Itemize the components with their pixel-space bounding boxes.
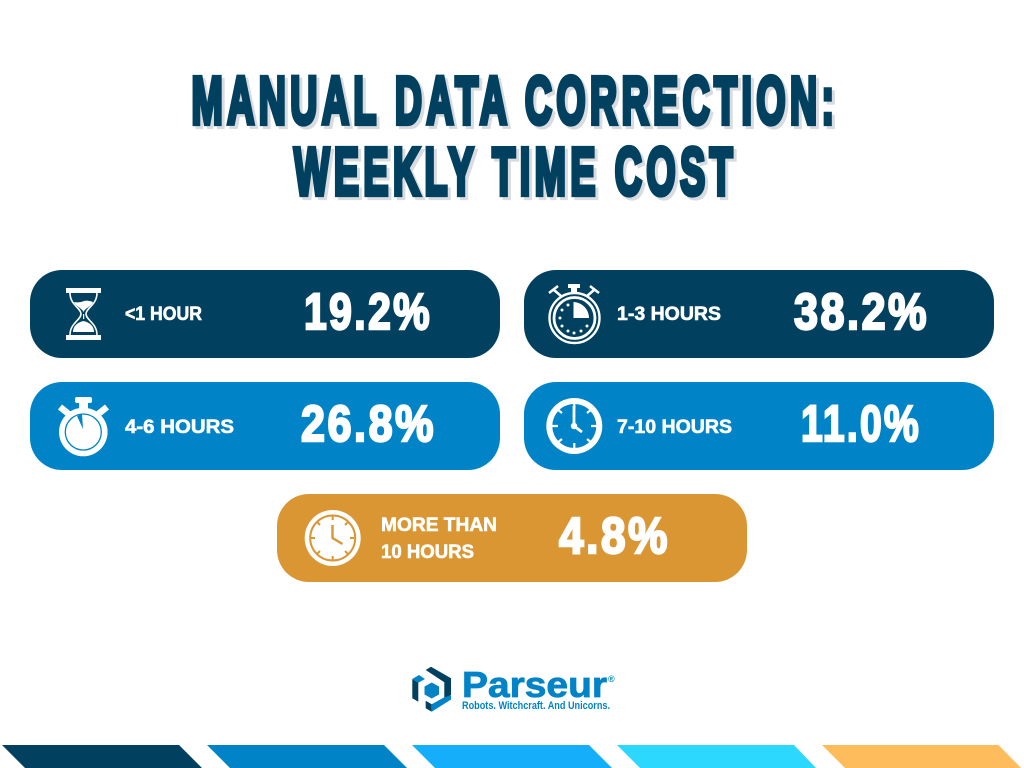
icon: Parseur hexagon mark bbox=[412, 667, 451, 712]
panel: more than 10 hours bbox=[277, 494, 747, 582]
label: 7-10 hours: 7-10 HOURS bbox=[617, 417, 732, 438]
title bbox=[192, 64, 842, 212]
icon: stopwatch with quarter dial bbox=[549, 284, 600, 343]
icon: white clock bbox=[305, 510, 361, 566]
wordmark: Parseur bbox=[462, 664, 607, 705]
footer color stripes bbox=[2, 745, 1021, 768]
panel: 1-3 hours bbox=[524, 270, 994, 358]
value: 38.2%: 38.2% bbox=[794, 283, 929, 340]
panel: 7-10 hours bbox=[524, 382, 994, 470]
icon: clock at four bbox=[546, 398, 602, 454]
panel: less than 1 hour bbox=[30, 270, 500, 358]
icon: hourglass bbox=[66, 288, 101, 340]
icon: stopwatch bbox=[59, 397, 108, 456]
value: 11.0%: 11.0% bbox=[801, 395, 921, 452]
registered mark: ® bbox=[608, 674, 615, 684]
label: 1-3 hours: 1-3 HOURS bbox=[617, 304, 721, 325]
label: less than 1 hour: <1 HOUR bbox=[125, 304, 202, 325]
tagline: Robots. Witchcraft. And Unicorns. bbox=[462, 700, 610, 712]
logo: Parseur bbox=[412, 664, 615, 712]
panel: 4-6 hours bbox=[30, 382, 500, 470]
value: 19.2%: 19.2% bbox=[304, 283, 432, 340]
value: 26.8%: 26.8% bbox=[301, 395, 436, 452]
label: more than 10 hours: MORE THAN bbox=[381, 515, 497, 536]
value: 4.8%: 4.8% bbox=[559, 507, 670, 564]
label: 4-6 hours: 4-6 HOURS bbox=[125, 417, 234, 438]
panel: more than 10 hours: 10 HOURS bbox=[381, 542, 474, 563]
